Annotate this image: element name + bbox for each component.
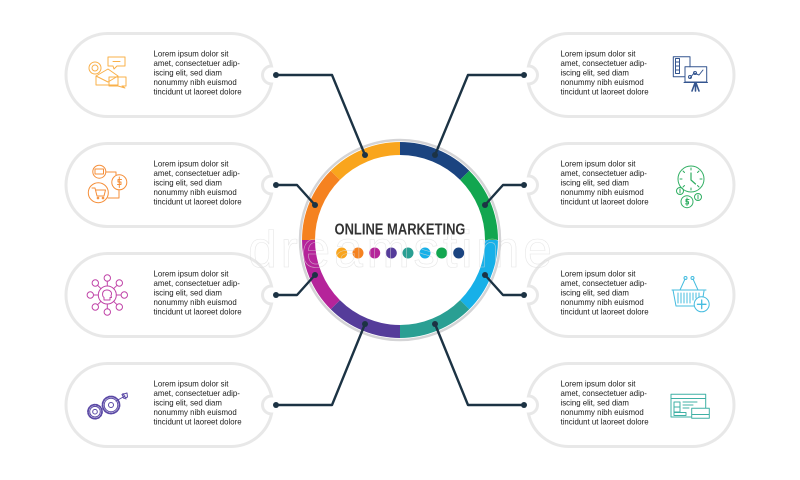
text block: iscing elit, sed diam	[154, 178, 222, 188]
text block: iscing elit, sed diam	[154, 68, 222, 78]
text block: amet, consectetuer adip-	[560, 279, 647, 288]
icon: clock and coins	[676, 166, 704, 208]
text block: amet, consectetuer adip-	[560, 169, 647, 178]
text block: amet, consectetuer adip-	[560, 389, 647, 398]
text block: tincidunt ut laoreet dolore	[154, 308, 242, 317]
title: ONLINE MARKETING	[334, 222, 466, 238]
text block: nonummy nibh euismod	[560, 188, 644, 197]
text block: Lorem ipsum dolor sit	[154, 380, 229, 388]
text block: iscing elit, sed diam	[154, 288, 222, 298]
text block: tincidunt ut laoreet dolore	[154, 418, 242, 427]
text block: tincidunt ut laoreet dolore	[154, 88, 242, 97]
icon: presentation board	[673, 57, 708, 91]
central ring	[300, 140, 500, 340]
connector: lower middle left	[273, 272, 318, 298]
text block: iscing elit, sed diam	[560, 68, 629, 78]
text block: Lorem ipsum dolor sit	[560, 270, 636, 278]
text block: nonummy nibh euismod	[560, 408, 644, 417]
text block: Lorem ipsum dolor sit	[560, 160, 636, 168]
panel: bottom left	[66, 364, 272, 446]
text block: amet, consectetuer adip-	[560, 59, 647, 68]
text block: tincidunt ut laoreet dolore	[560, 308, 649, 317]
connector: bottom right	[432, 321, 527, 408]
text block: amet, consectetuer adip-	[154, 279, 240, 288]
text block: nonummy nibh euismod	[560, 298, 644, 307]
panel: upper middle right	[528, 144, 734, 226]
text block: tincidunt ut laoreet dolore	[154, 198, 242, 207]
icon: email and chat	[89, 57, 126, 88]
color dot row	[336, 248, 464, 258]
watermark: dreamstime	[248, 221, 552, 279]
text block: nonummy nibh euismod	[154, 188, 237, 197]
icon: gears and target arrow	[88, 393, 128, 419]
text block: amet, consectetuer adip-	[154, 389, 240, 398]
text block: Lorem ipsum dolor sit	[154, 160, 229, 168]
text block: amet, consectetuer adip-	[154, 59, 240, 68]
connector: top right	[432, 72, 527, 158]
text block: Lorem ipsum dolor sit	[560, 50, 636, 58]
connector: lower middle right	[482, 272, 527, 298]
icon: payment and cart	[88, 165, 127, 203]
icon: browser and credit card	[671, 394, 709, 418]
icon: basket with plus	[672, 276, 709, 312]
text block: nonummy nibh euismod	[154, 78, 237, 87]
panel: top right	[528, 34, 734, 116]
panel: top left	[66, 34, 272, 116]
icon: head network	[87, 275, 128, 315]
text block: tincidunt ut laoreet dolore	[560, 418, 649, 427]
text block: nonummy nibh euismod	[560, 78, 644, 87]
text block: Lorem ipsum dolor sit	[560, 380, 636, 388]
connector: top left	[273, 72, 368, 158]
connector: upper middle left	[273, 182, 318, 208]
text block: Lorem ipsum dolor sit	[154, 50, 229, 58]
text block: Lorem ipsum dolor sit	[154, 270, 229, 278]
panel: lower middle left	[66, 254, 272, 336]
text block: amet, consectetuer adip-	[154, 169, 240, 178]
connector: bottom left	[273, 321, 368, 408]
connector: upper middle right	[482, 182, 527, 208]
text block: nonummy nibh euismod	[154, 298, 237, 307]
text block: tincidunt ut laoreet dolore	[560, 198, 649, 207]
text block: iscing elit, sed diam	[560, 178, 629, 188]
panel: lower middle right	[528, 254, 734, 336]
text block: iscing elit, sed diam	[560, 288, 629, 298]
text block: iscing elit, sed diam	[154, 398, 222, 408]
panel: bottom right	[528, 364, 734, 446]
text block: iscing elit, sed diam	[560, 398, 629, 408]
text block: tincidunt ut laoreet dolore	[560, 88, 649, 97]
panel: upper middle left	[66, 144, 272, 226]
text block: nonummy nibh euismod	[154, 408, 237, 417]
